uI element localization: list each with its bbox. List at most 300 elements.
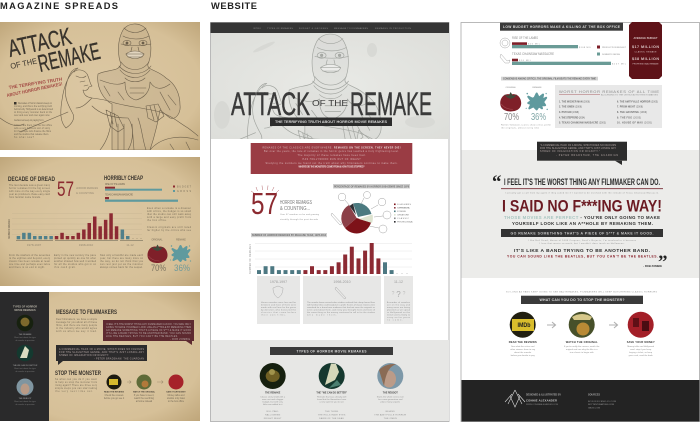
icon: splat rating 36%: 36% <box>174 263 190 273</box>
icon: tomato 70%: 70% <box>504 112 519 123</box>
text columns: for all the studios who got in on <box>54 263 97 266</box>
sidebar: types of remakes: THE REMAKE <box>18 333 32 336</box>
credits: WWW.CONNIEALEXANDER.COM <box>526 403 558 406</box>
step: save your money: studios only listen <box>167 397 186 400</box>
bar chart: horror remakes per year: 1998-2010 <box>79 243 93 247</box>
type: the reboot: for a new generation and <box>378 398 403 401</box>
era card: 1998-2010: the same thing as the money continued to roll in for the studios <box>307 311 376 314</box>
speech bubble: red quote: - ROB ZOMBIE <box>170 339 190 341</box>
step: save your money: to the box office <box>168 400 185 403</box>
sources: ROTTENTOMATOES.COM <box>588 403 614 406</box>
era card: 2011-2012: A number of remakes <box>387 301 411 304</box>
speech bubble: red quote: I FEEL IT'S THE WORST THING ANY FILMMAKER CAN DO. YOU ARE ONLY <box>106 323 191 326</box>
illustration: creature carrying woman <box>0 24 198 150</box>
quote: rob zombie: I like Evil Dead, House of 1000 Corpses, Devil's Rejects, I'm involved in it because <box>528 239 637 242</box>
panel: worst horror remakes list: 7. PROM NIGHT (2008) <box>617 106 643 108</box>
ticket: average budget: CLASSIC REMAKE <box>634 50 657 54</box>
type: the we can do better <box>316 363 347 420</box>
type: the reboot: Starts the whole series over <box>377 396 404 398</box>
bar chart: budget vs gross: PRODUCTION BUDGET <box>602 47 627 49</box>
title: attack of the remake: REMAKE <box>35 38 103 78</box>
sidebar: types of remakes: THE WE CAN DO BETTER <box>13 364 38 367</box>
step: save your money: won't stop if you keep <box>630 348 652 351</box>
text block: year as producers chase easy cash <box>9 193 51 196</box>
icon: creature head <box>500 38 510 48</box>
era card: 1978-1997 <box>257 276 300 324</box>
bar chart: budgets vs grosses: TEXAS CHAINSAW MASSACRE <box>105 194 133 196</box>
stat: 57 horror remakes: 57 <box>251 186 278 221</box>
type: the we can do better: THE THING <box>325 411 339 413</box>
text block: Dear filmmakers, we have a simple <box>56 318 98 321</box>
text columns: one time and perhaps even twice <box>9 263 51 266</box>
quote: rob zombie: THOSE MOVIES ARE PERFECT - YOU'RE ONLY GOING TO MAKE <box>504 215 660 220</box>
step: watch the original <box>133 374 156 403</box>
text block: rising again? There are three very <box>55 384 98 387</box>
stat: 57 horror remakes: steadily through the past decade <box>280 218 319 221</box>
section: types of horror movie remakes <box>211 340 449 421</box>
intro text: behind why Hollywood is so determined <box>14 108 54 111</box>
text columns: another showed how well it worked <box>54 260 97 263</box>
intro text: tells a very different sort of story <box>14 127 51 130</box>
red intro box: Studying the numbers we found out the truth about why filmmakers continue to make them. <box>265 162 398 165</box>
type: the remake: FRIGHT NIGHT <box>264 418 282 420</box>
sidebar: types of remakes <box>0 292 49 421</box>
text block: with more on the way every single <box>9 190 51 193</box>
red intro box: The majority of these remakes have been bad. <box>298 154 366 157</box>
type: the reboot: BEHIND <box>386 411 395 413</box>
credits: CONNIE ALEXANDER <box>526 398 557 402</box>
text columns: and there is no end in sight. <box>9 266 45 269</box>
text block: from familiar name brands. <box>9 196 41 199</box>
step: read the reviews: IMDb <box>518 323 531 329</box>
era card: 1998-2010: who made them. <box>307 314 337 316</box>
sidebar: types of remakes: TYPES OF HORROR <box>13 306 37 308</box>
sources: BOXOFFICEMOJO.COM <box>588 401 616 403</box>
heading: magazine spreads: MAGAZINE SPREADS <box>0 1 118 11</box>
title: attack of the remake: ATTACK <box>231 86 310 122</box>
navigation bar: BUDGET & GROSSES <box>299 28 329 30</box>
pie legend: PSYCHOLOGICAL <box>397 220 414 224</box>
bar chart: budget vs gross: RISE OF THE LAMBS <box>512 36 538 40</box>
title: attack of the remake: OF THE <box>10 57 38 71</box>
text columns: the way, so do not think that you <box>100 260 144 263</box>
text block <box>55 378 98 393</box>
sidebar: types of remakes: Short text about the type <box>14 336 37 339</box>
sidebar: types of remakes: of remake in question <box>15 339 35 342</box>
stat: 57 horror remakes <box>251 186 320 221</box>
heading bar: what can you do: WHAT CAN YOU DO TO STOP THE MONSTER? <box>540 298 624 302</box>
illustration: creature <box>240 34 382 139</box>
arrow <box>127 380 131 384</box>
era card: 2011-2012: 11-12 <box>394 280 403 284</box>
ticket: average budget <box>629 22 662 79</box>
heading bar <box>270 347 393 355</box>
step: watch the original: If you have to see it, <box>134 394 155 397</box>
speech bubble: dark quote: "A COMMERCIAL HACK OF A MOVIE, WHICH DOES NO FAVOURS <box>540 144 616 147</box>
stat: 57 horror remakes: HORROR REMAKES <box>280 200 312 206</box>
text block: right: Even when a remake is a disaster <box>147 207 191 210</box>
panel: worst horror remakes list: WORST HORROR REMAKES OF ALL TIME <box>559 89 659 94</box>
type: the we can do better: THE HILLS HAVE EYES <box>318 414 346 416</box>
chart heading strip: PERCENTAGE OF REMAKES BY HORROR SUB-GENRE SINCE 1978 <box>334 185 410 188</box>
text block: right: that the studio can still walk away <box>147 213 192 216</box>
era card: 2011-2012: ? <box>396 290 401 299</box>
intro text: for the people who finance the films <box>14 130 52 133</box>
panel: worst horror remakes list: 8. THE HAUNTING (1999) <box>617 111 647 114</box>
title: attack of the remake <box>231 86 432 122</box>
era card: 2011-2012: planned as we speak <box>387 310 411 312</box>
stat: 57 horror remakes: Over 57 remakes so far and growing <box>280 213 320 216</box>
title: attack of the remake: OF THE <box>312 98 348 108</box>
opening quote mark: “ <box>492 172 502 193</box>
step: save your money: your cash, read the book <box>629 354 654 357</box>
chart heading strip <box>333 184 410 188</box>
intro text: coming, and this is the terrifying truth <box>14 105 53 108</box>
sidebar: types of remakes: Short text about the type <box>14 400 37 403</box>
intro text <box>14 102 54 139</box>
stat: 57 horror remakes: HORROR REMAKES <box>76 186 98 190</box>
sources: IMDB.COM <box>588 408 600 410</box>
pie legend: SUPERNATURAL <box>397 206 411 210</box>
pie legend: CREATURE <box>397 214 410 216</box>
bar chart: budget vs gross: $15 MIL <box>528 44 541 46</box>
bar chart: budget vs gross: DOMESTIC GROSS <box>602 54 621 56</box>
stat: 57 horror remakes: & COUNTING... <box>280 206 310 212</box>
pie legend: ZOMBIE <box>397 211 407 213</box>
step: save your money <box>166 374 186 403</box>
panel: worst horror remakes list: 5. TEXAS CHAINSAW MASSACRE (2003) <box>559 122 606 124</box>
step: save your money: SAVE YOUR MONEY <box>166 390 186 394</box>
panel: worst horror remakes list: 4. THE STEPFORD (2004) <box>559 116 585 120</box>
stat: 57 horror remakes: 57 <box>57 178 74 201</box>
speech bubble: dark quote: FOR THE SLAUGHTER GENRE, AND THAT'S JUST LOSING ANY <box>540 147 616 150</box>
icon: splat 36%: 36% <box>531 112 546 123</box>
type: the remake: BILL PAUL <box>267 410 279 413</box>
era card: 1978-1997: made with real love for the genre <box>261 306 297 309</box>
speech bubble: red quote <box>103 320 194 345</box>
red intro box: REMAKES OF THE CLASSICS ARE EVERYWHERE. REMAKES ON THE SCREEN. THEY NEVER DIE! <box>262 146 401 150</box>
text block: to help us stop the monster from <box>55 381 97 384</box>
type: the we can do better: a new spin for you to see <box>320 400 345 404</box>
text block: right: the box office. <box>147 219 167 222</box>
pie legend: SLASHERS <box>397 203 412 206</box>
speech bubble: dark quote: - PETER BRADSHAW, THE GUARDIAN <box>556 154 618 157</box>
text block: horror remakes hit the big screen <box>9 187 51 190</box>
text block <box>9 184 51 199</box>
era card: 2011-2012: many more are being <box>387 306 411 309</box>
step: save your money: SAVE YOUR MONEY <box>627 340 655 344</box>
ticket: average budget: $38 MILLION <box>632 57 659 61</box>
intro text: Remakes of horror classics keep on <box>18 102 53 105</box>
subtitle: ABOUT HORROR REMAKES! <box>6 81 63 98</box>
speech bubble: red quote: IT'S LIKE A BAND TRYING TO BE ANOTHER BAND. YOU CAN SOUND <box>106 332 191 335</box>
era card: 2011-2012 <box>384 276 413 324</box>
quote: rob zombie: YOURSELF LOOK LIKE AN A**HOLE BY REMAKING THEM. <box>512 221 653 226</box>
text columns: Now only a handful are made each <box>100 254 144 257</box>
icon: tomato 70% <box>500 86 521 123</box>
bar chart: remakes per year <box>249 243 412 274</box>
icon: tomato rating 70%: ORIGINAL <box>152 238 163 242</box>
text block: right <box>147 207 192 232</box>
type: the remake: HALLOWEEN <box>265 414 281 416</box>
red intro box: HAS HOLLYWOOD RUN OUT OF IDEAS? <box>302 158 361 161</box>
text columns: always comes back for the sequel. <box>100 266 143 269</box>
quote: rob zombie: I love that movie so much, but I wouldn't dare touch on Halloween. <box>540 242 625 245</box>
heading bar: what can you do <box>521 296 643 304</box>
speech bubble: dark quote: FOR THE SLAUGHTER GENRE, AND THAT'S JUST LOSING ANY <box>59 351 144 354</box>
type: the reboot: THE REBOOT <box>383 392 398 394</box>
intro text: over and over and over again now. <box>14 114 50 117</box>
step: save your money: Money talks and Hollywood <box>627 345 655 348</box>
text columns: picked up quickly as one hit after <box>54 257 96 260</box>
panel: magazine spread 3 message <box>0 292 200 421</box>
step: save your money <box>627 312 655 357</box>
icon: tomato 70%: ORIGINAL <box>505 86 517 89</box>
type: the reboot: THE AMITYVILLE HORROR <box>374 414 407 416</box>
strip heading: critics: CONSENSUS AMONG CRITICS, THE ORIGINAL FILM BEATS THE REMAKE EVERY TIME <box>503 78 596 81</box>
era card: 2011-2012: in Hollywood so the <box>387 311 411 314</box>
era card: 1978-1997: by directors who honoured the <box>261 308 297 312</box>
era card: 1978-1997: between and most of them were <box>261 304 297 306</box>
stat: 57 horror remakes: & COUNTING <box>76 191 95 195</box>
type: the we can do better: Remake that was already well <box>317 396 347 398</box>
intro text: Critics hate them, but the box office <box>14 124 53 127</box>
bar chart: budget vs gross: $108 MIL <box>579 47 592 49</box>
intro text: So what now? <box>14 136 35 139</box>
navigation bar: MESSAGE TO FILMMAKERS <box>334 27 369 30</box>
panel: worst horror remakes list: 2. THE OMEN (2006) <box>559 106 582 108</box>
heading: decade of dread: DECADE OF DREAD <box>8 176 55 183</box>
stat: 57 horror remakes <box>57 178 98 201</box>
type: the remake: budget, but with very <box>263 400 284 404</box>
closing quote mark: ” <box>658 252 668 273</box>
era card: 1998-2010: reworked for a brand new audience that had not seen the originals or <box>307 306 375 309</box>
bar chart: budgets vs grosses: GROSS <box>177 191 191 193</box>
step: watch the original: WATCH THE ORIGINAL <box>566 340 598 344</box>
type: the remake: little new added to it <box>263 403 283 406</box>
panel: worst horror remakes list: ACCORDING TO THE CRITICS AT ROTTEN TOMATOES <box>601 94 659 96</box>
text block: simple steps you can start taking <box>55 387 98 390</box>
heading: website: WEBSITE <box>211 1 257 11</box>
era card: 2011-2012: ? <box>403 291 406 297</box>
step: read the reviews <box>104 374 125 400</box>
logo <box>505 390 525 407</box>
bar chart: horror remakes per year: 1978-1997 <box>27 243 41 247</box>
icon: splat 36% <box>526 86 548 123</box>
sidebar: types of remakes: of remake in question <box>15 370 35 373</box>
type: the remake: Classic story retold with a <box>260 396 286 398</box>
sources: SOURCES <box>588 394 600 396</box>
red intro box: But over the years, the rate of remakes in the horror genre has reached a truly frightening level. <box>264 150 399 153</box>
icon: splat rating 36%: REMAKE <box>176 238 186 242</box>
step: read the reviews: Check the reviews <box>105 394 124 397</box>
bar chart: budgets vs grosses: RISE OF THE LAMBS <box>105 183 125 186</box>
ticket: average budget: AVERAGE BUDGET <box>634 37 658 40</box>
bar chart: budget vs gross: $10 MIL <box>519 60 532 62</box>
bar chart: budgets vs grosses <box>105 183 192 202</box>
bar chart: horror remakes per year: 11-12 <box>126 243 134 247</box>
navigation bar: TYPES OF REMAKES <box>267 27 294 30</box>
sources <box>588 394 616 410</box>
text block: right: Classic originals are still rated <box>147 226 192 229</box>
arrow <box>609 322 618 328</box>
type: the we can do better: DAWN OF THE DEAD <box>319 417 344 420</box>
step: read the reviews: READ THE REVIEWS <box>509 340 537 344</box>
bar chart: horror remakes per year <box>8 213 143 247</box>
red intro box <box>251 143 412 174</box>
bar chart: budget vs gross: TEXAS CHAINSAW MASSACRE <box>512 52 554 56</box>
title: attack of the remake: ATTACK <box>6 23 74 63</box>
sidebar: types of remakes: THE REBOOT <box>18 398 32 400</box>
step: watch the original: original and see why the film is a <box>566 348 598 351</box>
subtitle: THE TERRIFYING TRUTH <box>8 76 63 90</box>
speech bubble: dark quote <box>537 142 627 165</box>
heading: message to filmmakers: MESSAGE TO FILMMAKERS <box>56 309 117 316</box>
speech bubble: red quote: LIKE THE BEATLES, BUT YOU CAN'T BE THE BEATLES. <box>106 335 178 338</box>
subtitle bar: THE TERRIFYING TRUTH ABOUT HORROR MOVIE REMAKES <box>275 120 387 124</box>
panel: website mockup <box>210 22 450 422</box>
text columns: can rest just yet as the monster <box>100 263 143 266</box>
panel: worst horror remakes list <box>555 85 662 128</box>
sidebar: types of remakes: Short text about the type <box>14 367 37 370</box>
arrow <box>157 380 163 384</box>
intro text: to bring every monster back to life <box>14 111 53 114</box>
quote: rob zombie <box>492 172 668 273</box>
step: watch the original: watch the real thing <box>134 397 155 400</box>
panel: magazine spread 2 data <box>0 157 200 286</box>
navigation bar: REMAKES IN PRODUCTION <box>375 27 411 30</box>
step: read the reviews: See what the critics and <box>511 345 535 348</box>
speech bubble: dark quote: SHRED OF IMAGINATION OR DIGNITY. <box>59 354 109 357</box>
era card: 1998-2010: even cared about them, and every year brought more and more of <box>307 308 375 312</box>
text columns: Early in the new century the pace <box>54 254 97 257</box>
type: the we can do better: THE "WE CAN DO BETTER" <box>316 392 347 394</box>
text columns: year, but there are many more on <box>100 257 144 260</box>
intro text: Audiences keep on paying for it. <box>14 119 44 122</box>
icon: splat rating 36% <box>170 238 191 273</box>
heading: horribly cheap: HORRIBLY CHEAP <box>104 175 143 182</box>
text columns: classic has been remade at least <box>9 260 50 263</box>
speech bubble: red quote: GO REMAKE SOMETHING THAT'S A PIECE OF S**T & MAKE IT GOOD <box>106 329 191 332</box>
type: the reboot <box>374 363 407 420</box>
panel: worst horror remakes list: 9. THE FOG (2005) <box>617 118 641 120</box>
bar chart: remakes per year: NUMBER OF REMAKES <box>249 244 252 274</box>
intro text: and the studios that release them. <box>14 133 49 136</box>
chart heading strip <box>251 233 327 237</box>
text columns: From the slashers of the seventies <box>9 254 51 257</box>
footer <box>462 380 700 422</box>
step: watch the original: true classic to begin with <box>570 351 594 354</box>
text block <box>56 318 98 333</box>
era card: 2011-2012: ? <box>392 291 395 297</box>
subtitle bar <box>270 118 392 126</box>
text block: right: far higher by the critics who see <box>147 229 192 232</box>
text columns <box>9 254 144 269</box>
icon: splat 36%: REMAKE <box>532 86 542 89</box>
speech bubble: dark quote: - PETER BRADSHAW, THE GUARDIAN <box>94 358 144 360</box>
quote: rob zombie: I actually got a call from my agent if they asked me if I wanted to be involved with the remake of Texas Chainsaw Massacre. <box>505 192 659 194</box>
panel: worst horror remakes list: 3. PSYCHO (1998) <box>559 112 579 114</box>
quote: rob zombie: GO REMAKE SOMETHING THAT'S A PIECE OF S**T & MAKE IT GOOD. <box>510 232 654 236</box>
quote: rob zombie: I SAID NO F***ING WAY! <box>502 197 662 216</box>
step: read the reviews: before you decide to pay <box>511 354 536 357</box>
step: read the reviews: READ THE REVIEWS <box>104 390 125 394</box>
era card: 2011-2012: carry on for years <box>387 316 411 319</box>
text block: So what can you do if you want <box>55 378 97 381</box>
step: watch the original: at home instead <box>136 400 153 403</box>
type: the reboot: plans many sequels <box>381 402 401 404</box>
pie legend: CLASSIC <box>397 217 409 220</box>
step: read the reviews: other viewers have to say <box>510 348 536 351</box>
panel: worst horror remakes list: 10. HOUSE OF WAX (2005) <box>617 122 652 124</box>
quote: rob zombie: YOU CAN SOUND LIKE THE BEATLES, BUT YOU CAN'T BE THE BEATLES. <box>507 255 658 259</box>
step: watch the original: WATCH THE ORIGINAL <box>133 390 156 394</box>
quote: rob zombie: IT'S LIKE A BAND TRYING TO BE ANOTHER BAND. <box>514 248 650 254</box>
title: attack of the remake <box>6 23 103 78</box>
quote: rob zombie: - ROB ZOMBIE <box>643 264 662 268</box>
bar chart: budget vs gross <box>512 36 627 66</box>
caption: Rotten Tomatoes scores show critics prefer <box>501 124 551 126</box>
panel: magazine spread 1 cover <box>0 22 200 150</box>
era card: 2011-2012: trend seems likely to <box>387 314 411 316</box>
era card: 1998-2010: 1998-2010 <box>333 280 351 284</box>
bar chart: budget vs gross: $107 MIL <box>612 64 627 66</box>
text block: in the industry who would agree <box>56 327 98 330</box>
era card: 1978-1997: classics that came before <box>261 311 297 314</box>
bar chart: horror remakes per year: NUMBER OF REMAKES <box>8 219 11 239</box>
text block: right: with a large and easy profit from <box>147 216 191 219</box>
text columns: this cash grab. <box>54 266 76 269</box>
step: read the reviews: about the remake <box>514 351 532 354</box>
heading bar: box office: LOW BUDGET HORRORS MAKE A KILLING AT THE BOX OFFICE <box>503 25 621 29</box>
pie chart: genres <box>341 203 373 233</box>
icons: horror tropes around pie <box>331 192 391 233</box>
text block: the very next time out. <box>55 390 93 393</box>
arrow <box>547 322 556 328</box>
caption <box>501 124 551 130</box>
type: the reboot: THE OMEN <box>384 418 397 420</box>
text block: message for you about all of these <box>56 321 98 324</box>
pie legend <box>394 203 414 224</box>
type: the remake <box>260 363 286 420</box>
step: read the reviews <box>509 312 537 357</box>
icon: hand <box>500 54 510 63</box>
navigation bar: INTRO <box>253 28 261 30</box>
era card: 1978-1997: their own films. <box>261 314 286 316</box>
text block: right: with critics, the budget is so small <box>147 210 191 213</box>
speech bubble: dark quote: A COMMERCIAL HACK OF A MOVIE, WHICH DOES NO FAVOURS <box>59 348 144 351</box>
title: attack of the remake: REMAKE <box>350 86 432 122</box>
type: the remake: THE REMAKE <box>265 392 281 394</box>
icon: tomato rating 70% <box>148 238 168 273</box>
text block: The last decade saw a great many <box>9 184 51 187</box>
red intro box: WHERE DID THE MONSTERS COME FROM & HOW TO BE STOPPED? <box>298 166 365 168</box>
panel: long page continuation <box>461 22 700 422</box>
era card: 1978-1997: Horror remakes were few and far <box>261 301 296 304</box>
text block: films, and there are many people <box>56 324 98 327</box>
credits <box>526 394 561 406</box>
section: quote background <box>462 150 699 278</box>
era card: 1998-2010: The remake boom arrived when studios realised that cheap horror films <box>307 301 376 304</box>
text block: with us when we say it loud. <box>56 330 97 333</box>
heading: stop the monster: STOP THE MONSTER <box>55 370 101 377</box>
step: save your money: Money talks and <box>168 394 185 397</box>
credits: DESIGNED & ILLUSTRATED BY <box>526 394 561 396</box>
type: the we can do better: loved but the filmmakers have <box>317 398 347 401</box>
step: watch the original <box>564 312 600 354</box>
panel: worst horror remakes list: 6. THE AMITYVILLE HORROR (2005) <box>617 100 658 104</box>
text columns: to the eighties and beyond, every <box>9 257 51 260</box>
